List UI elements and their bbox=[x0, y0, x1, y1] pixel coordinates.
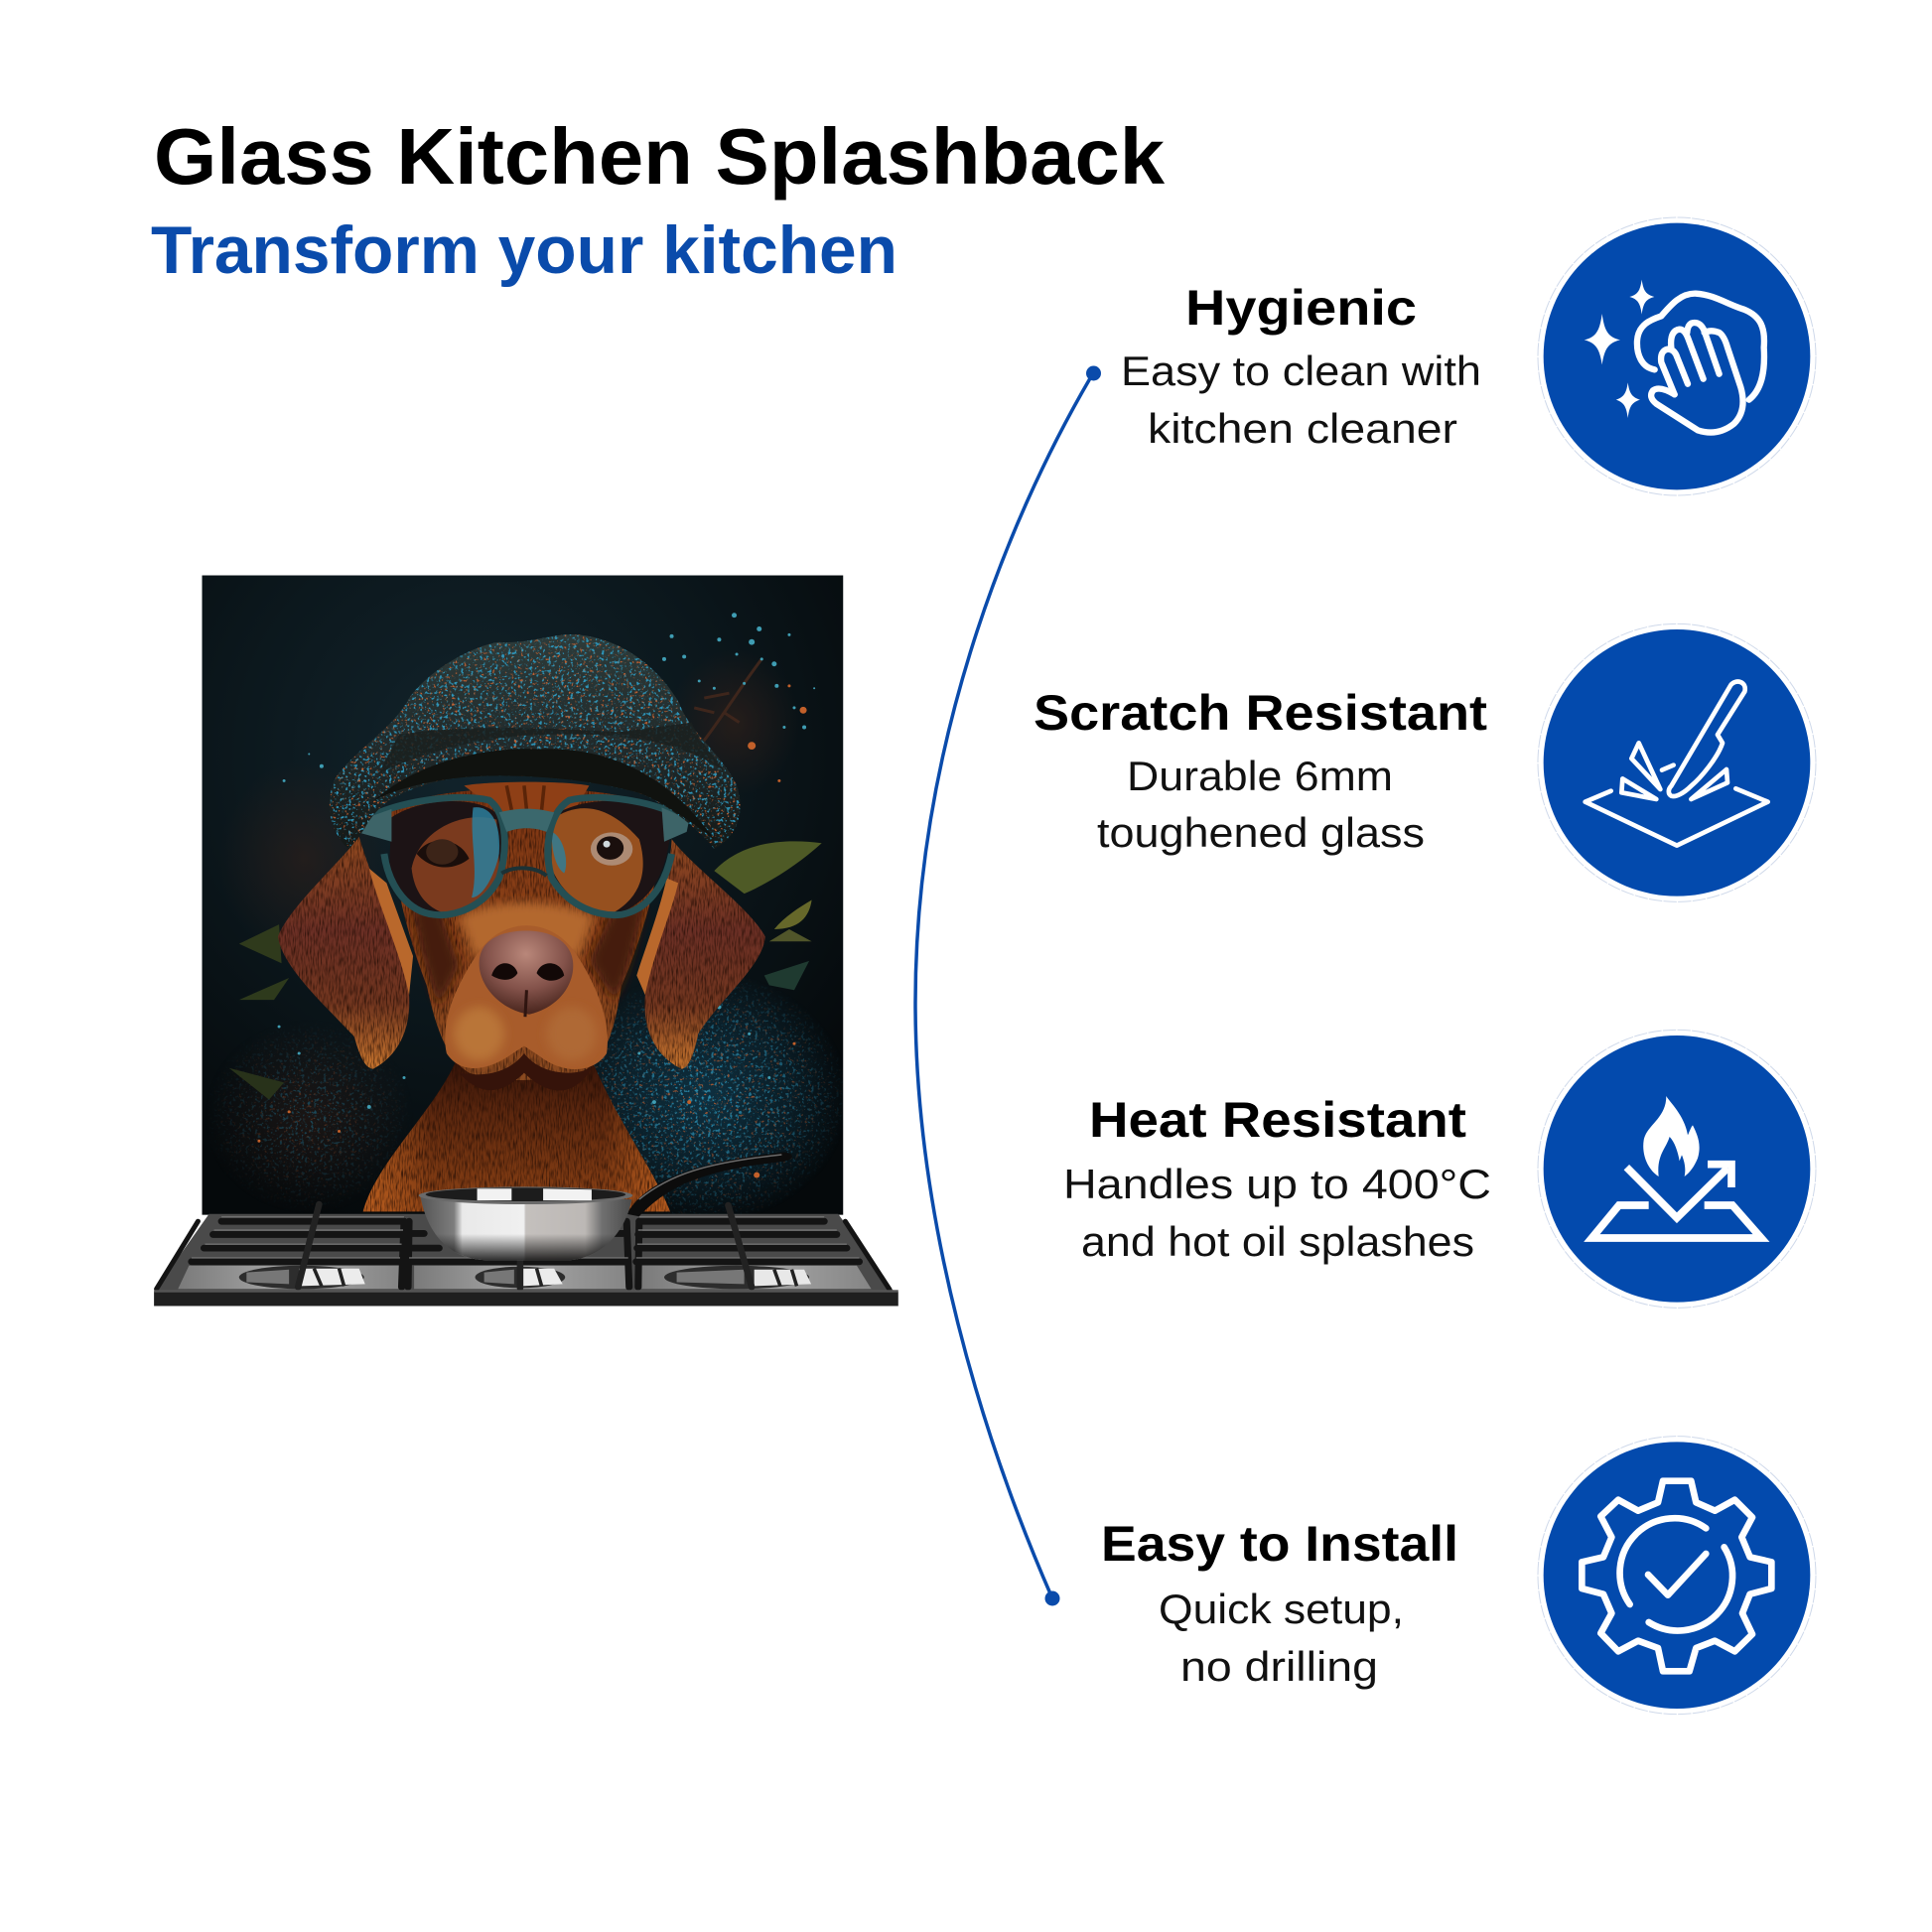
feature text: Scratch Resistant: toughened glass bbox=[1097, 809, 1425, 856]
face bbox=[389, 788, 664, 1080]
connector curve bbox=[915, 365, 1101, 1606]
feature text: Heat Resistant: Heat Resistant bbox=[1089, 1092, 1466, 1148]
hob grates bbox=[157, 1221, 890, 1289]
connector dot: bottom bbox=[1044, 1590, 1060, 1606]
icon badge: gear with check bbox=[1538, 1437, 1816, 1715]
feature text: Easy to Install bbox=[1101, 1516, 1458, 1690]
infographic canvas bbox=[151, 126, 1817, 1716]
connector dot: top bbox=[1086, 365, 1101, 381]
feature text: Heat Resistant: and hot oil splashes bbox=[1081, 1218, 1474, 1265]
feature text: Easy to Install: no drilling bbox=[1180, 1643, 1378, 1690]
feature text: Hygienic: Hygienic bbox=[1185, 280, 1417, 336]
feature text: Scratch Resistant: Scratch Resistant bbox=[1034, 685, 1487, 741]
grate cross bars bbox=[298, 1204, 752, 1288]
burners bbox=[239, 1266, 811, 1289]
feature text: Easy to Install: Easy to Install bbox=[1101, 1516, 1458, 1572]
muzzle bbox=[445, 925, 608, 1069]
neck and chest bbox=[363, 1053, 670, 1211]
subtitle: Transform your kitchen bbox=[151, 212, 897, 288]
feature text: Heat Resistant: Handles up to 400°C bbox=[1063, 1161, 1491, 1207]
front lip bbox=[154, 1292, 898, 1306]
gas hob bbox=[154, 1204, 898, 1306]
feature text: Scratch Resistant bbox=[1034, 685, 1487, 856]
nose bbox=[480, 930, 573, 1015]
icon badge: flame on glass bbox=[1538, 1030, 1816, 1308]
feature text: Scratch Resistant: Durable 6mm bbox=[1127, 753, 1393, 799]
icon badge: cleaning hand bbox=[1538, 217, 1816, 495]
feature text: Easy to Install: Quick setup, bbox=[1159, 1586, 1404, 1632]
title: Glass Kitchen Splashback bbox=[154, 112, 1166, 201]
product image: splashback and hob bbox=[154, 576, 898, 1306]
hob steel plates bbox=[178, 1266, 872, 1289]
feature text: Hygienic: Easy to clean with bbox=[1121, 347, 1481, 394]
dog portrait bbox=[278, 634, 765, 1211]
feature text: Hygienic bbox=[1121, 280, 1481, 452]
left ear bbox=[278, 837, 409, 1069]
hat bbox=[330, 634, 741, 849]
splashback panel bbox=[202, 576, 849, 1224]
feature text: Heat Resistant bbox=[1063, 1092, 1491, 1265]
dog fur shapes bbox=[278, 788, 765, 1211]
feature text: Hygienic: kitchen cleaner bbox=[1148, 405, 1457, 452]
icon badge: knife on glass bbox=[1538, 623, 1816, 901]
right ear bbox=[644, 839, 765, 1069]
glasses bbox=[361, 797, 689, 915]
frying pan bbox=[419, 1153, 792, 1260]
